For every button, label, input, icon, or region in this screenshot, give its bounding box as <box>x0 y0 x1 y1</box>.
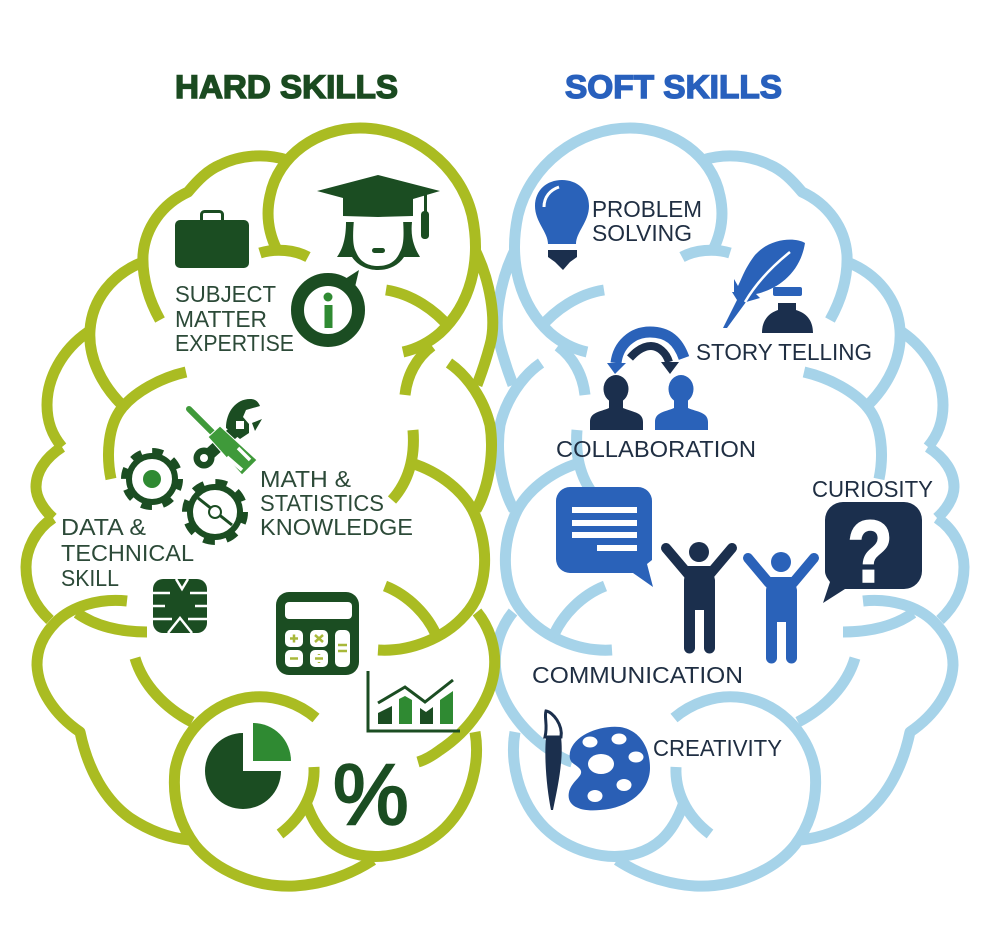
icon: paint palette <box>569 727 650 810</box>
text: curiosity: CURIOSITY <box>812 476 933 502</box>
text: subject matter expertise: MATTER <box>175 306 267 332</box>
text: problem solving: PROBLEM <box>592 196 702 222</box>
icon: light bulb <box>535 180 589 270</box>
title: hard skills: HARD SKILLS <box>175 69 398 105</box>
text: data and technical skill: DATA & <box>61 514 146 540</box>
text: data and technical skill: SKILL <box>61 565 119 591</box>
icon: percent sign: % <box>333 748 409 843</box>
icon: briefcase <box>175 212 249 268</box>
icon: question bubble <box>823 502 922 603</box>
icon: two people <box>590 375 708 430</box>
icon: graduate with cap <box>317 175 440 270</box>
text: communication: COMMUNICATION <box>532 662 743 688</box>
text: creativity: CREATIVITY <box>653 735 782 761</box>
icon: pie chart <box>205 723 291 809</box>
left brain outline <box>26 128 495 886</box>
text: math and statistics knowledge: STATISTICS <box>260 490 384 516</box>
icon: exchange arrows <box>607 332 684 374</box>
text: data and technical skill <box>61 514 194 591</box>
icon: blue person arms raised <box>748 552 814 664</box>
right brain outline <box>495 128 964 886</box>
text: subject matter expertise: EXPERTISE <box>175 330 294 356</box>
text: math and statistics knowledge: MATH & <box>260 466 351 492</box>
icon: chip <box>153 579 207 633</box>
icon: wrench and screwdriver <box>189 399 262 475</box>
text: subject matter expertise: SUBJECT <box>175 281 276 307</box>
text: collaboration: COLLABORATION <box>556 436 756 462</box>
text: story telling: STORY TELLING <box>696 339 872 365</box>
icon: ink bottle <box>762 287 813 333</box>
text: problem solving <box>592 196 702 246</box>
text: subject matter expertise <box>175 281 294 356</box>
icon: info bubble <box>298 270 359 340</box>
icon: feather quill <box>723 240 805 328</box>
icon: question bubble: ? <box>847 502 893 601</box>
text: data and technical skill: TECHNICAL <box>61 540 194 566</box>
icon: bar and line chart <box>368 671 460 731</box>
icon: gear with dial <box>186 483 244 541</box>
icon: gear with dot <box>125 452 179 506</box>
text: math and statistics knowledge <box>260 466 413 540</box>
icon: paint brush <box>545 711 562 810</box>
icon: speech bubble with lines <box>556 487 653 587</box>
text: problem solving: SOLVING <box>592 220 692 246</box>
text: math and statistics knowledge: KNOWLEDGE <box>260 514 413 540</box>
icon: dark person arms raised <box>666 542 732 654</box>
title: soft skills: SOFT SKILLS <box>565 69 782 105</box>
icon: calculator <box>276 592 359 675</box>
